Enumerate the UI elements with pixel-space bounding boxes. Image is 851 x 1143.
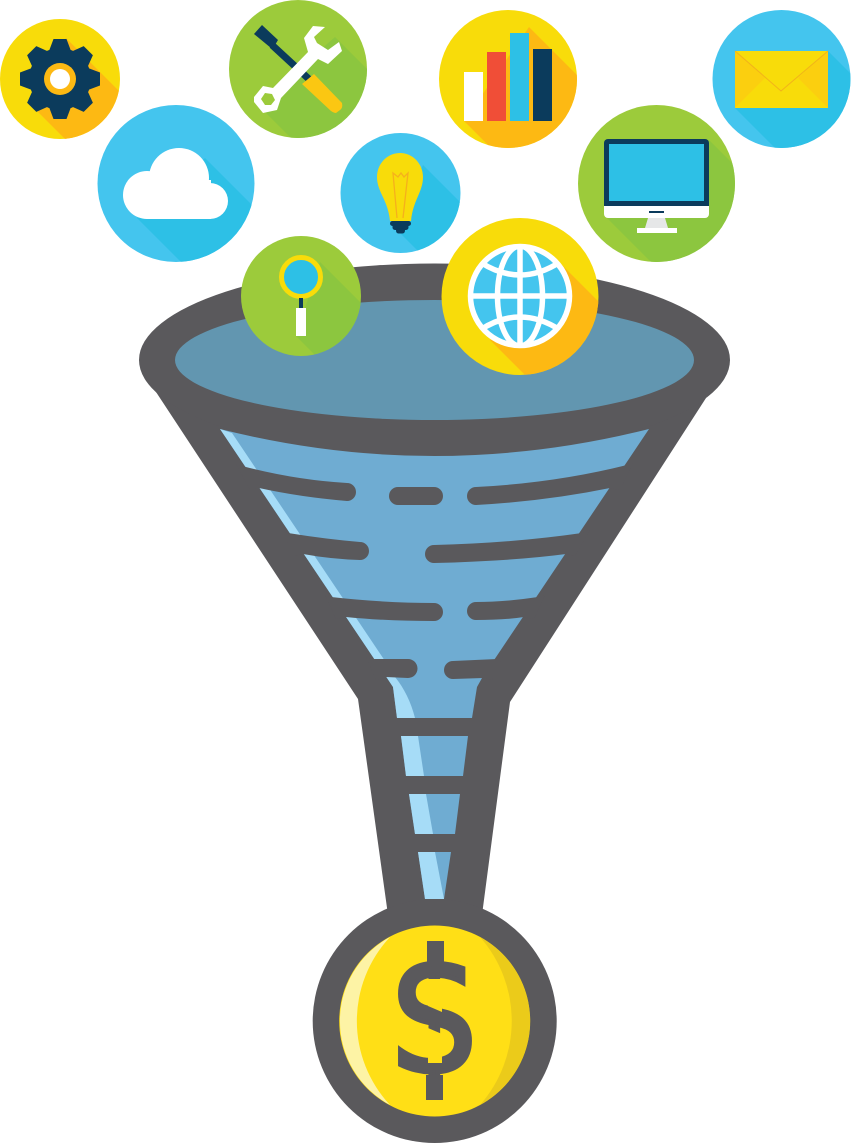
funnel: [139, 264, 730, 915]
neck segment 2: [401, 736, 468, 776]
coin highlight: [340, 937, 390, 1105]
liquid highlight: [220, 429, 415, 718]
neck segment 4: [418, 852, 451, 899]
screwdriver: [254, 25, 342, 113]
icon: tools: [229, 0, 367, 138]
neck segment 3: [409, 794, 460, 834]
coin face: [339, 926, 530, 1116]
funnel upper liquid: [220, 429, 649, 718]
icon: bar chart: [439, 10, 577, 148]
icon: gear: [0, 19, 120, 139]
funnel rim: [139, 264, 730, 456]
icon: monitor: [578, 105, 735, 262]
icon: light bulb: [340, 133, 460, 253]
dollar coin: [313, 899, 557, 1143]
icon: globe: [442, 218, 598, 375]
funnel body: [156, 300, 706, 915]
icon: cloud: [98, 105, 254, 262]
funnel opening: [175, 300, 694, 420]
coin outer ring: [313, 899, 557, 1143]
coin shade: [480, 937, 530, 1105]
funnel level dashes: [236, 463, 633, 680]
icon: envelope: [712, 10, 850, 148]
icon: magnifier: [241, 236, 361, 356]
wrench: [254, 26, 342, 113]
dollar sign: $: [388, 917, 482, 1112]
